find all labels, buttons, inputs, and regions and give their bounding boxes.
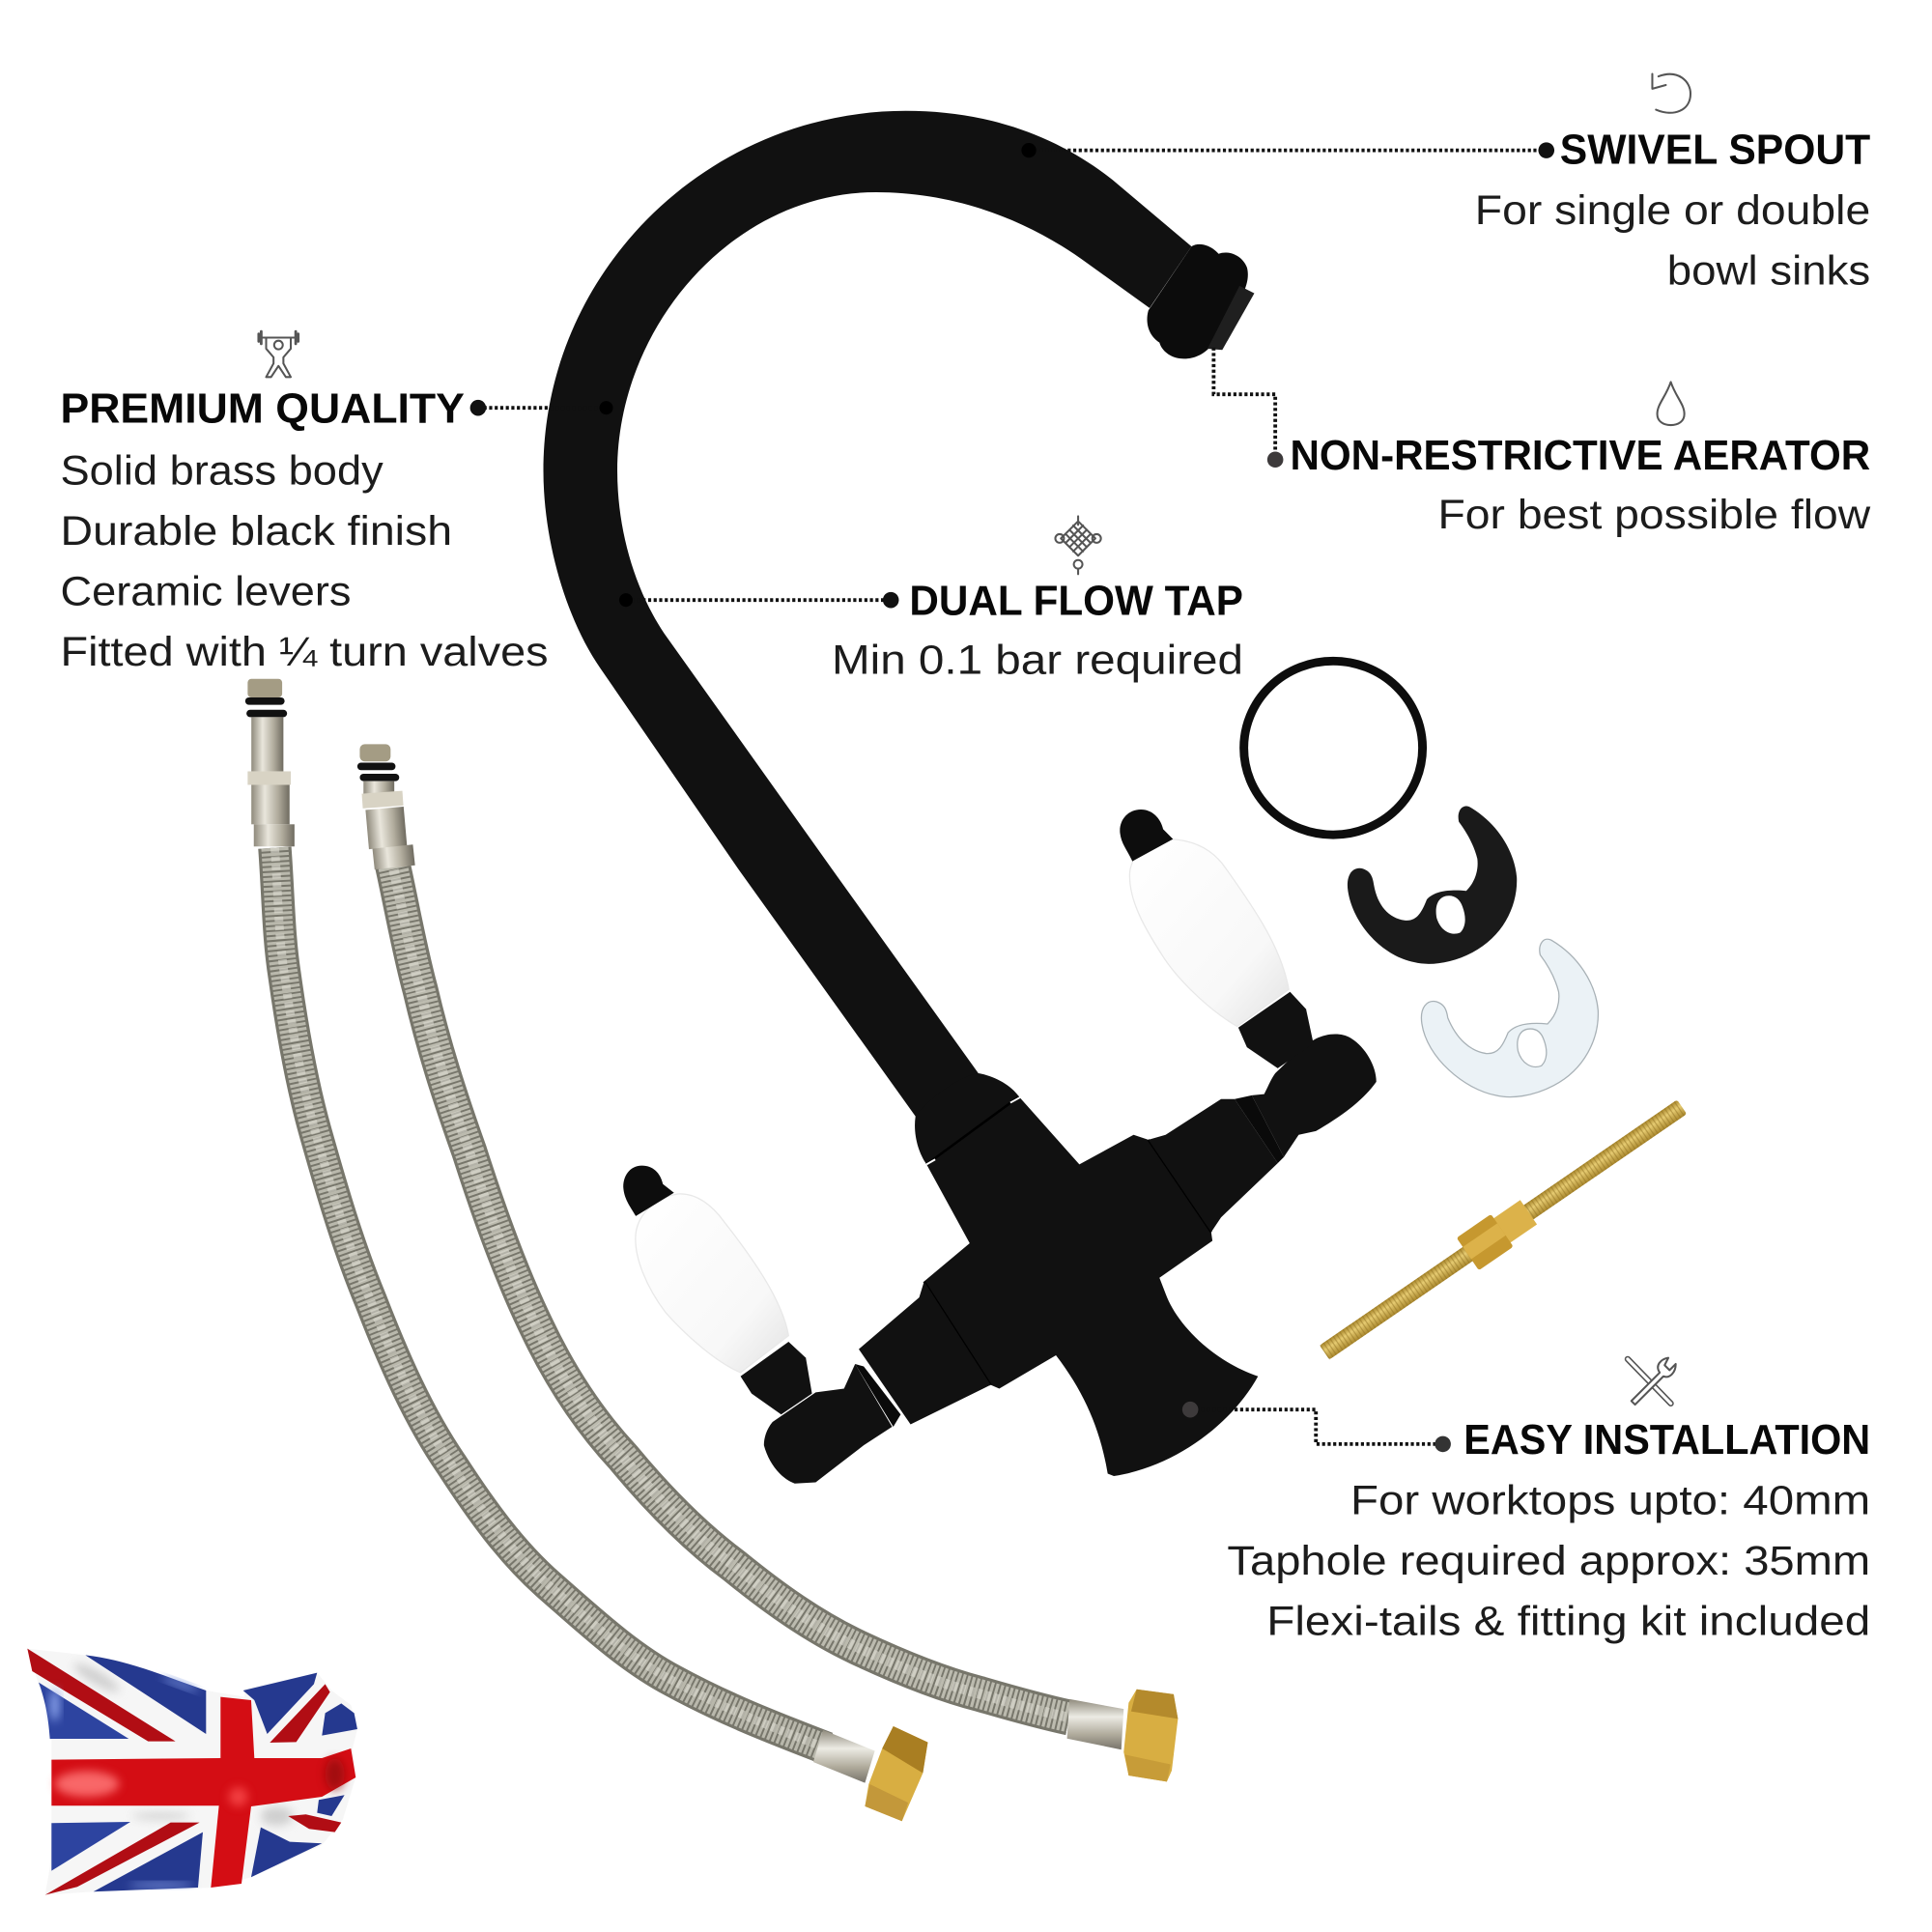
- heading: aerator: NON-RESTRICTIVE AERATOR: [1290, 433, 1870, 479]
- aerator: [1208, 286, 1254, 350]
- tap body: [543, 111, 1377, 1484]
- fitting: rubber o-ring: [1244, 661, 1423, 835]
- lever: lower ceramic handle: [623, 1166, 788, 1373]
- leader line: dual flow: [619, 592, 898, 608]
- right valve: [1149, 1099, 1278, 1233]
- lever: upper ceramic handle: [1120, 810, 1289, 1026]
- text block: dual flow: Min 0.1 bar required: [832, 638, 1243, 684]
- text block: premium quality: Solid brass body: [60, 447, 384, 494]
- heading: easy installation: EASY INSTALLATION: [1463, 1417, 1870, 1463]
- leader line: aerator: [1213, 348, 1283, 468]
- text block: easy installation: Flexi-tails & fitting kit included: [1266, 1599, 1870, 1645]
- brass nut left: [865, 1726, 927, 1821]
- text block: premium quality: [60, 447, 549, 675]
- text block: easy installation: Taphole required approx: 35mm: [1227, 1538, 1870, 1584]
- text block: easy installation: For worktops upto: 40mm: [1350, 1478, 1870, 1524]
- icon: knot: [1055, 516, 1101, 574]
- flag highlights: [50, 1675, 345, 1888]
- brass nut right: [1123, 1690, 1178, 1781]
- heading: premium quality: PREMIUM QUALITY: [60, 385, 465, 432]
- text block: premium quality: Durable black finish: [60, 508, 452, 554]
- text block: premium quality: Fitted with ¼ turn valves: [60, 629, 549, 675]
- text block: aerator: For best possible flow: [1438, 492, 1870, 538]
- text block: easy installation: [1227, 1478, 1870, 1645]
- leader line: swivel spout: [1021, 142, 1554, 158]
- body seam marks: [924, 1096, 1211, 1385]
- left valve: [859, 1282, 991, 1424]
- text block: swivel spout: bowl sinks: [1667, 248, 1870, 295]
- brass coupling nut: [1457, 1196, 1540, 1270]
- flag: union jack: [27, 1649, 357, 1895]
- icon: crossed tools: [1628, 1358, 1676, 1405]
- text block: premium quality: Ceramic levers: [60, 568, 352, 614]
- heading: swivel spout: SWIVEL SPOUT: [1560, 128, 1871, 174]
- heading: dual flow: DUAL FLOW TAP: [909, 578, 1243, 624]
- leader line: easy installation: [1182, 1402, 1451, 1452]
- spout: [543, 111, 1191, 1117]
- fitting: silver horseshoe washer: [1421, 939, 1598, 1097]
- callout: premium quality: [60, 331, 613, 675]
- text block: swivel spout: For single or double: [1475, 187, 1870, 234]
- callout: non-restrictive aerator: [1213, 348, 1870, 538]
- icon: water drop: [1658, 382, 1685, 425]
- icon: weightlifter: [259, 331, 298, 377]
- text block: swivel spout: [1475, 187, 1870, 295]
- fitting: threaded brass rod: [1314, 1091, 1693, 1369]
- callout: swivel spout: [1021, 74, 1871, 295]
- hose: left flexi-tail: [245, 679, 927, 1821]
- callout: dual flow tap: [619, 516, 1243, 684]
- body and base: [915, 1073, 1258, 1476]
- fitting: black horseshoe washer: [1348, 806, 1517, 964]
- spout collar: [1148, 244, 1248, 358]
- callout: easy installation: [1182, 1358, 1870, 1645]
- icon: swivel arrow: [1652, 74, 1690, 113]
- leader line: premium quality: [470, 400, 613, 415]
- hose: right flexi-tail: [357, 744, 1178, 1781]
